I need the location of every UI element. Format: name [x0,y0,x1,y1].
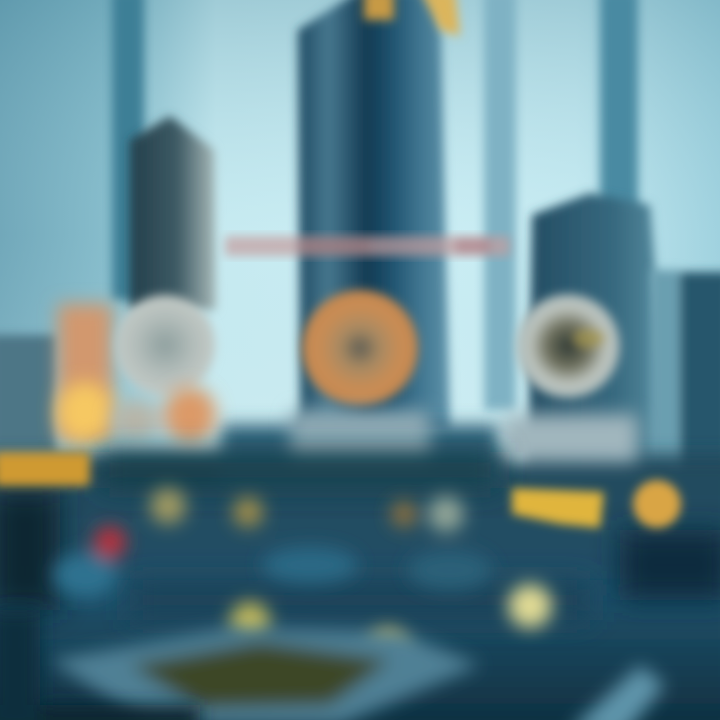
gold tower top [364,0,460,36]
blurred text below center circle [290,410,430,460]
amber light strip left [0,452,90,486]
left circle icon [115,295,215,395]
far right building [650,270,720,482]
small city lights [53,488,552,668]
far right column [600,0,638,220]
orange glowing panel left [58,304,112,440]
dark tree line [0,452,720,620]
center orange circle icon [302,290,418,406]
far left building [0,335,56,455]
blurred heading band [225,236,510,256]
bottom dark edge [0,610,665,720]
right circle icon [516,294,620,398]
blurred text below right circle [503,414,638,462]
yellow glow left [57,382,113,442]
ground [0,425,720,720]
left building [130,116,216,310]
left orange glow [111,387,216,443]
park at the bottom [50,628,480,720]
central tower [298,0,450,430]
right slim column [484,0,516,410]
right building [528,193,672,480]
yellow lights right [512,480,681,528]
left tall column [112,0,144,300]
